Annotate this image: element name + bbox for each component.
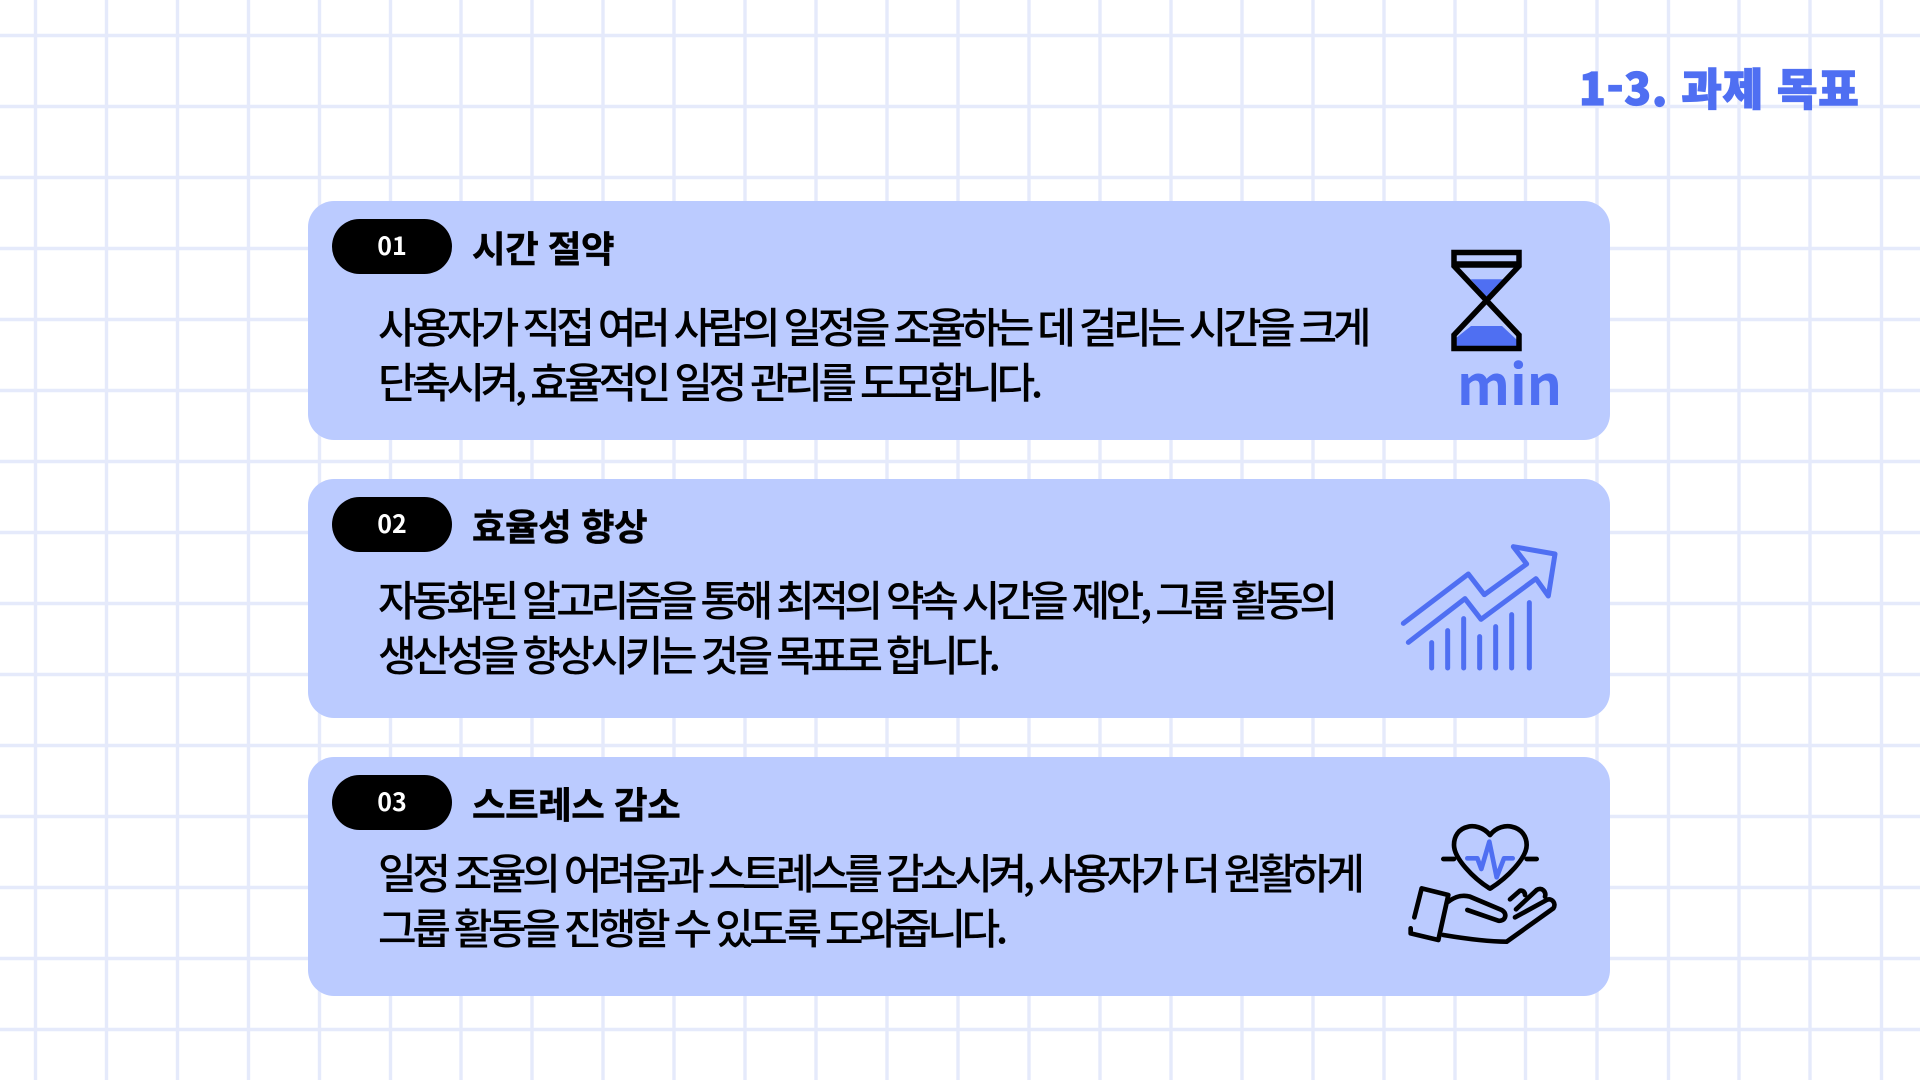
- body text: 시간 절약: 단축시켜, 효율적인 일정 관리를 도모합니다.: [378, 350, 1039, 411]
- body text: 효율성 향상: [378, 568, 1334, 684]
- number badge 02: 02: [377, 505, 407, 541]
- panel: 스트레스 감소: [308, 757, 1610, 996]
- body text: 효율성 향상: 자동화된 알고리즘을 통해 최적의 약속 시간을 제안, 그룹 활동의: [378, 568, 1334, 629]
- icon label: min: min: [1457, 341, 1562, 421]
- panel: 효율성 향상: [308, 479, 1610, 718]
- number badge 03: [332, 775, 452, 830]
- body text: 시간 절약: 사용자가 직접 여러 사람의 일정을 조율하는 데 걸리는 시간을 크게: [378, 295, 1367, 356]
- heading: 시간 절약: 시간 절약: [472, 220, 614, 273]
- number badge 01: [332, 219, 452, 274]
- number badge 02: [332, 497, 452, 552]
- body text: 스트레스 감소: [378, 841, 1361, 957]
- icon: heart pulse over hand: [1408, 824, 1557, 944]
- body text: 효율성 향상: 생산성을 향상시키는 것을 목표로 합니다.: [378, 623, 997, 684]
- body text: 스트레스 감소: 그룹 활동을 진행할 수 있도록 도와줍니다.: [378, 896, 1004, 957]
- body text: 스트레스 감소: 일정 조율의 어려움과 스트레스를 감소시켜, 사용자가 더 원활하게: [378, 841, 1360, 902]
- heading: 스트레스 감소: 스트레스 감소: [472, 776, 680, 829]
- panel: 시간 절약: [308, 201, 1610, 440]
- number badge 01: 01: [377, 227, 407, 263]
- title: 1-3. 과제 목표: [1579, 54, 1860, 118]
- number badge 03: 03: [377, 783, 407, 819]
- body text: 시간 절약: [378, 295, 1368, 411]
- icon: hourglass: [1451, 250, 1522, 352]
- icon: rising chart with arrow: [1400, 544, 1558, 670]
- heading: 효율성 향상: 효율성 향상: [472, 498, 647, 551]
